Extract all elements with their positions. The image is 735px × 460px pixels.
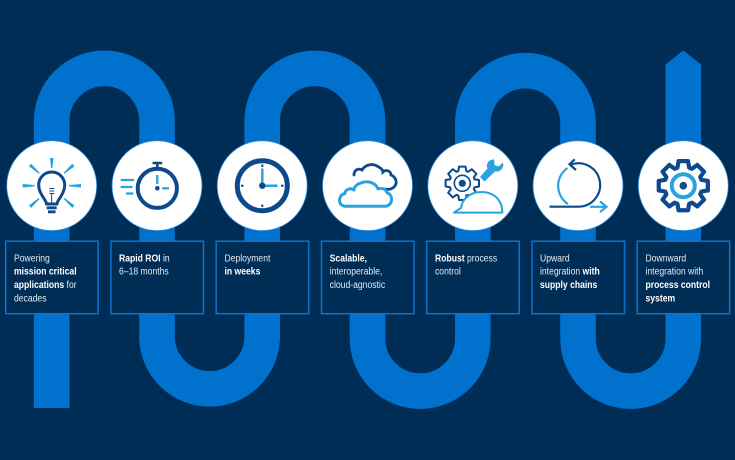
text box 5: control (435, 266, 461, 277)
icon: light bulb (7, 141, 97, 231)
text box 3: Deployment (224, 253, 271, 263)
icon: clock (217, 141, 307, 231)
text box 2: 6–18 months (119, 266, 169, 277)
text box 1 (6, 241, 98, 314)
step 3: deployment (216, 141, 309, 314)
text box 6: Upward (540, 253, 570, 263)
text box 1: Powering (14, 253, 50, 263)
step 1: powering mission critical applications (6, 141, 98, 314)
text box 4: cloud-agnostic (330, 280, 386, 290)
text box 3: in weeks (224, 266, 260, 277)
text box 2 (111, 241, 204, 314)
text box 7: integration with (645, 266, 703, 277)
text box 7: process control (645, 280, 710, 290)
text box 4: Scalable, (330, 253, 367, 263)
text box 3 (216, 241, 309, 314)
step 2: rapid ROI (111, 141, 204, 314)
icon: clouds (322, 141, 412, 231)
text box 6 (532, 241, 624, 314)
text box 7 (637, 241, 730, 314)
text box 2: Rapid ROI in (119, 253, 170, 263)
text box 4 (322, 241, 414, 314)
text box 6: integration with (540, 266, 600, 277)
text box 5 (427, 241, 519, 314)
text box 1: decades (14, 293, 47, 304)
winding arrow path (52, 50, 701, 408)
step 4: scalable (322, 141, 414, 314)
icon: loop arrow (533, 141, 623, 231)
step 6: upward integration (532, 141, 624, 314)
text box 1: mission critical (14, 266, 77, 277)
step 5: robust process control (427, 141, 519, 314)
text box 4: interoperable, (330, 266, 382, 277)
text box 6: supply chains (540, 280, 597, 290)
icon: gear, wrench and hard hat (428, 141, 518, 231)
step 7: downward integration (637, 141, 730, 314)
icon: gear (638, 141, 728, 231)
text box 7: system (645, 293, 675, 304)
icon: stopwatch (112, 141, 202, 231)
text box 7: Downward (645, 253, 686, 263)
text box 1: applications for (14, 280, 77, 290)
text box 5: Robust process (435, 253, 497, 263)
